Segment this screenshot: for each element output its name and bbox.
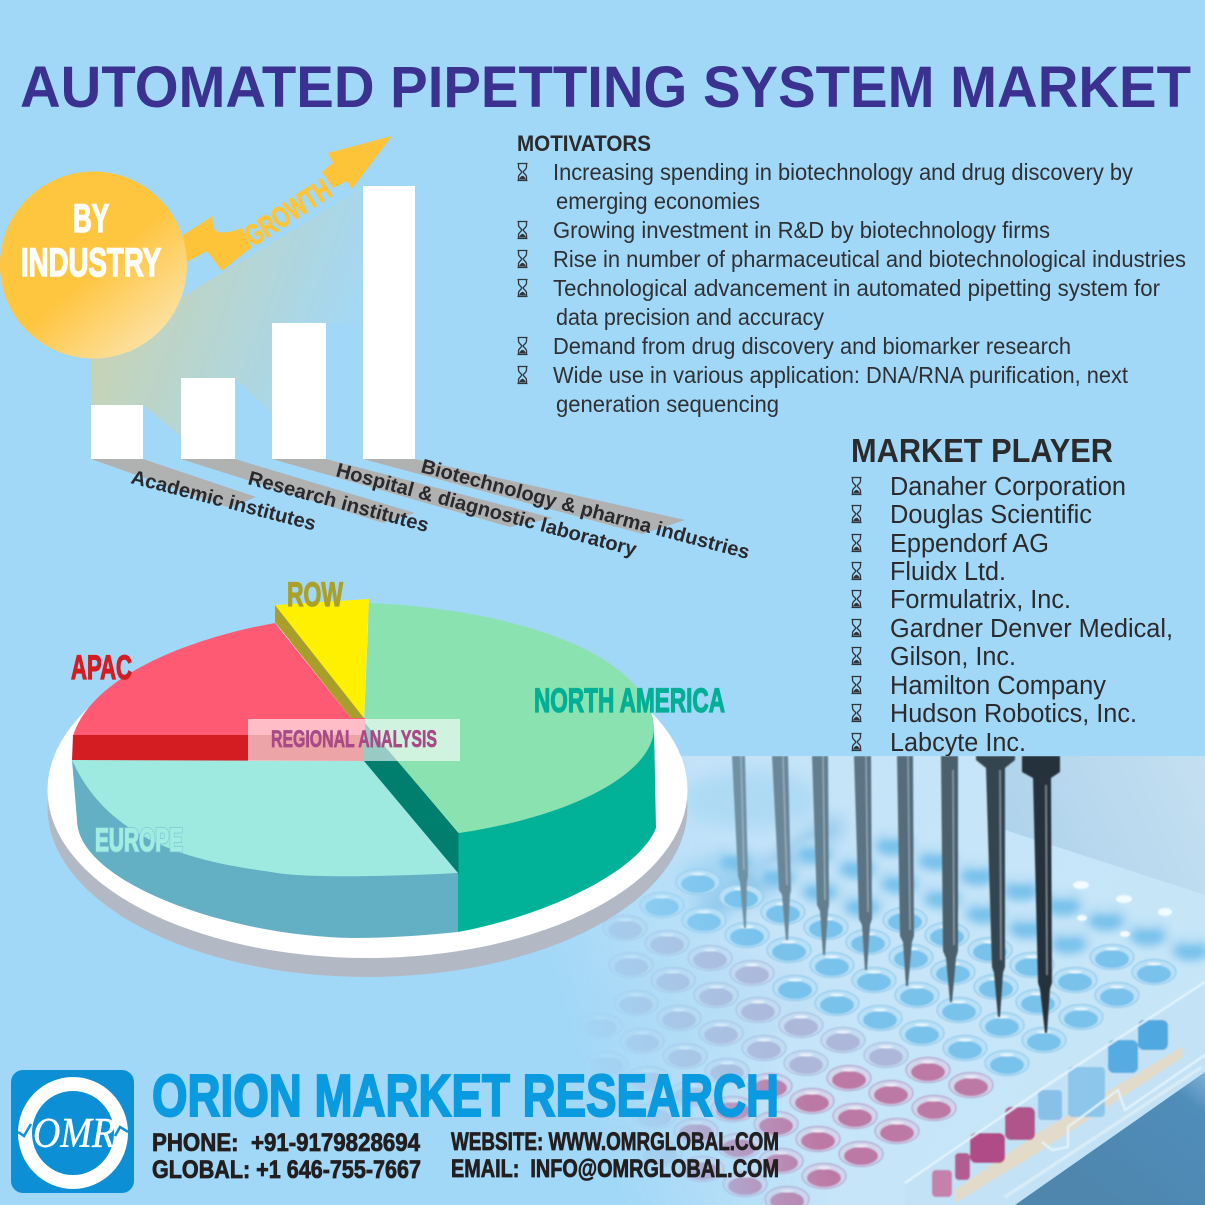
panel: regional analysis pie chart <box>48 576 725 977</box>
by industry circle: INDUSTRY <box>21 241 161 285</box>
label: europe <box>95 822 183 858</box>
label: europe: EUROPE <box>95 822 183 858</box>
label: apac: APAC <box>71 649 132 687</box>
player list names: Douglas Scientific <box>890 501 1092 529</box>
contact details: EMAIL: INFO@OMRGLOBAL.COM <box>451 1155 779 1183</box>
motivators text <box>553 159 1186 417</box>
panel: market players <box>851 432 1173 757</box>
category labels: Academic institutes <box>129 467 318 535</box>
label: row: ROW <box>287 576 344 614</box>
player list bullets <box>852 478 862 750</box>
player list names <box>890 473 1173 757</box>
north america side <box>458 727 656 932</box>
motivators text: Increasing spending in biotechnology and drug discovery by <box>553 159 1133 185</box>
category labels: Biotechnology & pharma industries <box>419 456 752 564</box>
label strips <box>91 459 685 534</box>
photo: pipette tips over a well plate <box>592 756 1205 1205</box>
motivators text: data precision and accuracy <box>556 304 824 330</box>
regional analysis box <box>248 719 460 761</box>
chart background wedge <box>91 188 362 436</box>
growth label: GROWTH <box>239 174 337 253</box>
player list names: Danaher Corporation <box>890 473 1126 501</box>
white plate <box>48 622 688 958</box>
europe side <box>72 760 458 938</box>
player list names: Gilson, Inc. <box>890 643 1016 671</box>
motivators text: Rise in number of pharmaceutical and biotechnological industries <box>553 246 1186 272</box>
europe top <box>72 760 458 876</box>
title: AUTOMATED PIPETTING SYSTEM MARKET <box>20 55 1191 120</box>
player list names: Fluidx Ltd. <box>890 558 1006 586</box>
player list names: Formulatrix, Inc. <box>890 586 1071 614</box>
panel: footer branding <box>11 1063 779 1193</box>
bars <box>91 186 415 459</box>
motivators text: Technological advancement in automated pipetting system for <box>553 275 1160 301</box>
player list names: Eppendorf AG <box>890 530 1049 558</box>
motivators text: Wide use in various application: DNA/RNA purification, next <box>553 362 1129 388</box>
growth arrow <box>183 136 392 271</box>
inner dark teal side <box>364 722 458 873</box>
company name: ORION MARKET RESEARCH <box>152 1063 779 1129</box>
contact details: PHONE: +91-9179828694 <box>152 1129 420 1157</box>
by industry circle <box>0 172 187 358</box>
motivators bullets <box>518 164 528 384</box>
by industry circle: BY <box>73 197 109 241</box>
panel: motivators <box>517 131 1186 417</box>
category labels: Hospital & diagnostic laboratory <box>334 460 640 561</box>
motivators text: emerging economies <box>556 188 760 214</box>
motivators text: Growing investment in R&D by biotechnology firms <box>553 217 1050 243</box>
label: europe: EUROPE <box>95 822 183 858</box>
player list names: Gardner Denver Medical, <box>890 615 1173 643</box>
apac top <box>73 623 365 736</box>
category labels <box>129 456 752 564</box>
heading: motivators: MOTIVATORS <box>517 131 651 156</box>
player list names: Labcyte Inc. <box>890 729 1026 757</box>
row side <box>275 605 364 718</box>
icon: omr logo <box>11 1070 134 1193</box>
motivators text: Demand from drug discovery and biomarker research <box>553 333 1071 359</box>
player list names: Hudson Robotics, Inc. <box>890 700 1137 728</box>
heading: market player: MARKET PLAYER <box>851 432 1113 469</box>
icon: omr logo: OMR <box>33 1111 115 1157</box>
label: north america: NORTH AMERICA <box>534 682 725 720</box>
apac side <box>72 735 364 761</box>
panel: by industry growth chart <box>0 136 752 564</box>
plate shadow <box>48 639 688 977</box>
contact details: GLOBAL: +1 646-755-7667 <box>152 1156 421 1184</box>
motivators text: generation sequencing <box>556 391 779 417</box>
contact details: WEBSITE: WWW.OMRGLOBAL.COM <box>451 1128 779 1156</box>
regional analysis box: REGIONAL ANALYSIS <box>271 726 437 753</box>
player list names: Hamilton Company <box>890 672 1106 700</box>
category labels: Research institutes <box>246 468 431 537</box>
north america top <box>364 603 654 833</box>
contact details <box>152 1128 779 1184</box>
row top <box>275 599 369 718</box>
